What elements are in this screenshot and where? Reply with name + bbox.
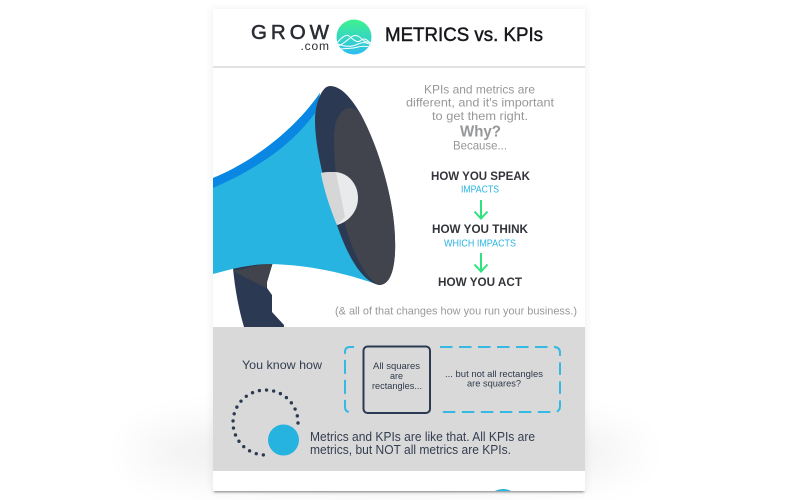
text block: intro: Why? (460, 124, 501, 140)
icon: megaphone (213, 86, 395, 327)
icon: logo circle (336, 20, 372, 54)
icon: solid circle KPIs (268, 424, 299, 456)
flow: how you speak, think, act (431, 169, 530, 289)
megaphone cone (213, 93, 379, 285)
infographic page (213, 9, 585, 500)
page drop shadow (130, 8, 640, 492)
logo wordmark: .com (300, 39, 329, 53)
text block: intro: different, and it's important (406, 96, 555, 110)
panel: squares and rectangles analogy (213, 327, 585, 471)
logo wordmark (252, 24, 330, 50)
arrow 2 (474, 253, 488, 272)
rectangle caption (446, 370, 543, 388)
explanation text: Metrics and KPIs are like that. All KPIs are (310, 430, 535, 444)
explanation text: metrics, but NOT all metrics are KPIs. (310, 443, 511, 457)
solid square (364, 346, 430, 413)
header (251, 20, 543, 54)
you know how: You know how (242, 358, 322, 372)
rectangle caption: are squares? (467, 378, 521, 390)
rectangle caption: ... but not all rectangles (445, 369, 543, 380)
how you think: HOW YOU THINK (432, 222, 528, 236)
impacts label: IMPACTS (461, 184, 499, 196)
closing note: (& all of that changes how you run your business.) (335, 306, 577, 318)
how you speak: HOW YOU SPEAK (431, 169, 530, 183)
megaphone dome (321, 172, 358, 225)
title: METRICS vs. KPIs (385, 25, 543, 46)
dashed rectangle (345, 347, 560, 412)
text block: intro: KPIs and metrics are (424, 82, 535, 96)
megaphone disc (315, 86, 395, 285)
infographic canvas (164, 14, 606, 495)
explanation text (310, 430, 535, 457)
text block: intro (406, 82, 555, 152)
solid square: All squares (373, 361, 420, 372)
text block: intro: Because... (453, 138, 507, 152)
arrow 1 (474, 200, 488, 218)
logo wordmark: GROW (251, 21, 330, 44)
solid square: rectangles... (372, 381, 422, 392)
solid square: are (390, 371, 403, 382)
disc inner (334, 108, 395, 285)
cone highlight band (213, 93, 320, 188)
how you act: HOW YOU ACT (438, 275, 523, 289)
text block: intro: to get them right. (432, 109, 528, 123)
icon: dotted circle metrics (233, 390, 298, 455)
which impacts label: WHICH IMPACTS (444, 238, 516, 250)
megaphone handle (233, 262, 284, 327)
next section circle peek (495, 489, 511, 491)
